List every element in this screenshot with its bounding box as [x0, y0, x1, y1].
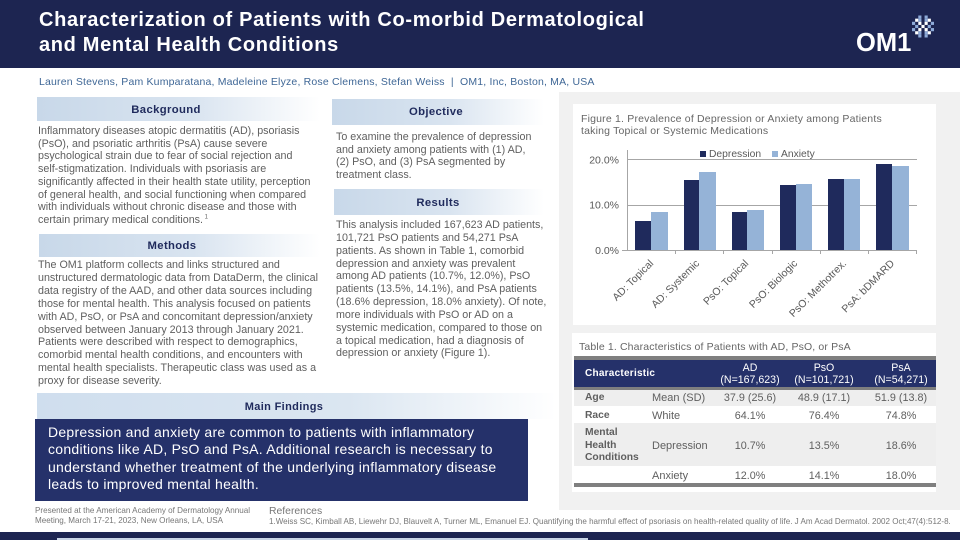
row: anxiety: 14.1%: [809, 470, 839, 482]
panel: table 1: [572, 333, 936, 492]
text: objective: (2) PsO, and (3) PsA segmented by: [336, 156, 505, 168]
text: results: depression or anxiety (Figure 1).: [336, 347, 490, 359]
text: objective: treatment class.: [336, 169, 412, 181]
references: [269, 506, 951, 526]
table caption: Table 1. Characteristics of Patients with AD, PsO, or PsA: [579, 341, 851, 353]
row: depression: Health: [585, 440, 616, 451]
callout text: Depression and anxiety are common to patients with inflammatory: [48, 424, 474, 440]
text: background: of general health, and social functioning when compared: [38, 189, 306, 201]
text: results: patients. As shown in Table 1, comorbid: [336, 245, 524, 257]
heading: results: [334, 189, 544, 215]
header: PsO: [794, 362, 854, 386]
references heading: References: [269, 506, 322, 517]
header: PsO: PsO: [814, 362, 834, 374]
text: results: depression and anxiety was prevalent: [336, 258, 515, 270]
row: anxiety: 12.0%: [735, 470, 765, 482]
row: age: 48.9 (17.1): [798, 392, 850, 404]
callout text: understand whether treatment of the underlying inflammatory disease: [48, 459, 496, 475]
x axis labels: PsO: Biologic: [747, 258, 800, 311]
title: Characterization of Patients with Co-morbid Dermatological: [39, 9, 645, 31]
header: PsO: (N=101,721): [794, 374, 854, 386]
heading: results: Results: [416, 197, 460, 209]
x axis labels: PsO: Methotrex.: [787, 258, 849, 320]
text: methods: Patients were described with respect to demographics,: [38, 336, 298, 348]
logo mark: dotted star: [912, 16, 934, 38]
callout text: conditions like AD, PsO and PsA. Additional research is necessary to: [48, 441, 493, 457]
header: PsA: (N=54,271): [874, 374, 928, 386]
row: age: [574, 390, 936, 406]
text: background: (PsO), and psoriatic arthritis (PsA) cause severe: [38, 138, 267, 150]
text: objective: [336, 131, 531, 181]
text: objective: and anxiety among patients with (1) AD,: [336, 144, 525, 156]
figure caption: Figure 1. Prevalence of Depression or Anxiety among Patients: [581, 113, 882, 125]
heading: objective: [332, 99, 544, 125]
text: background: Inflammatory diseases atopic dermatitis (AD), psoriasis: [38, 125, 300, 137]
row: depression: Depression: [652, 440, 708, 452]
text: results: patients (13.5%, 14.1%), and PsA patients: [336, 283, 537, 295]
logo wordmark: OM1: [856, 29, 911, 57]
row: depression: 13.5%: [809, 440, 839, 452]
text: methods: with AD, PsO, or PsA and concomitant depression/anxiety: [38, 311, 313, 323]
text: results: [336, 219, 546, 359]
row: anxiety: [574, 466, 936, 483]
header banner: [0, 0, 960, 68]
text: results: among AD patients (10.7%, 12.0%), PsO: [336, 270, 530, 282]
y axis labels: 10.0%: [589, 200, 619, 212]
text: methods: mental health specialists. Therapeutic class was used as a: [38, 362, 316, 374]
text: objective: To examine the prevalence of depression: [336, 131, 531, 143]
row: depression: 18.6%: [886, 440, 916, 452]
text: background: significantly affected in their health state utility, perception: [38, 176, 310, 188]
y axis labels: [589, 154, 619, 257]
header: AD: [720, 362, 780, 386]
row: depression: 10.7%: [735, 440, 765, 452]
header lower rule: [574, 387, 936, 390]
bars: depression: [635, 164, 892, 250]
text: methods: observed between January 2013 through January 2021.: [38, 324, 304, 336]
row: age: Mean (SD): [652, 392, 705, 404]
text: methods: those for mental health. This analysis focused on patients: [38, 298, 311, 310]
text: methods: [38, 259, 318, 387]
text: results: more individuals with PsO or AD on a: [336, 309, 513, 321]
row: race: White: [652, 410, 680, 422]
heading: methods: [39, 234, 320, 257]
text: conference note: [35, 506, 250, 525]
callout: main findings: [35, 419, 528, 501]
row: depression: Mental: [585, 427, 618, 438]
row: depression: [574, 423, 936, 466]
title: and Mental Health Conditions: [39, 34, 339, 56]
text: results: (18.6% depression, 18.0% anxiety). Of note,: [336, 296, 546, 308]
panel: figure 1: [573, 104, 936, 325]
text: background: [38, 125, 310, 226]
text: background: self-stigmatization. Individuals with psoriasis are: [38, 163, 266, 175]
heading: methods: Methods: [148, 240, 196, 252]
x axis labels: AD: Topical: [610, 258, 656, 304]
legend: Anxiety: [781, 149, 816, 160]
legend: Depression: [709, 149, 761, 160]
text: background: certain primary medical conditions. 1: [38, 214, 208, 226]
panel: figure and table background: [559, 92, 960, 510]
text: background: psychological strain due to fear of social rejection and: [38, 150, 292, 162]
footer accent: [57, 538, 588, 540]
row: race: 74.8%: [886, 410, 916, 422]
text: results: a topical medication, had a diagnosis of: [336, 335, 524, 347]
text: methods: comorbid mental health conditions, and encounters with: [38, 349, 303, 361]
header: AD: (N=167,623): [720, 374, 780, 386]
text: methods: unstructured dermatologic data from DataDerm, the clinical: [38, 272, 318, 284]
heading: main findings: Main Findings: [245, 401, 323, 413]
text: conference note: Presented at the American Academy of Dermatology Annual: [35, 506, 250, 515]
header: PsA: [874, 362, 928, 386]
reference text: 1.Weiss SC, Kimball AB, Liewehr DJ, Blauvelt A, Turner ML, Emanuel EJ. Quantifying the harmful effect of psoriasis on health-related quality of life. J Am Acad Dermatol. 2002 Oct;47(4):512-8.: [269, 517, 951, 526]
row: anxiety: Anxiety: [652, 470, 688, 482]
text: results: systemic medication, compared to those on: [336, 322, 542, 334]
logo: OM1: [856, 16, 934, 57]
title: [39, 9, 645, 56]
text: methods: The OM1 platform collects and links structured and: [38, 259, 280, 271]
row: race: 64.1%: [735, 410, 765, 422]
row: age: Age: [585, 392, 604, 403]
bar chart: prevalence by treatment: [589, 149, 917, 320]
row: race: [574, 406, 936, 423]
x axis labels: AD: Systemic: [649, 258, 702, 311]
heading: objective: Objective: [409, 106, 463, 118]
text: background: with individuals without chronic disease and those with: [38, 201, 297, 213]
header: AD: AD: [743, 362, 757, 374]
header: PsA: PsA: [891, 362, 911, 374]
row: race: 76.4%: [809, 410, 839, 422]
row: race: Race: [585, 410, 610, 421]
y axis labels: 20.0%: [589, 154, 619, 166]
callout text: [48, 424, 496, 492]
text: conference note: Meeting, March 17-21, 2023, New Orleans, LA, USA: [35, 516, 223, 525]
bars: anxiety: [651, 166, 909, 250]
header: characteristic: Characteristic: [585, 368, 655, 379]
footer bar: [0, 532, 960, 540]
figure caption: [581, 113, 882, 137]
x axis labels: PsO: Topical: [701, 258, 751, 308]
table top rule: [574, 356, 936, 360]
row: anxiety: 18.0%: [886, 470, 916, 482]
x axis labels: [610, 257, 897, 320]
row: age: 37.9 (25.6): [724, 392, 776, 404]
text: results: This analysis included 167,623 AD patients,: [336, 219, 543, 231]
figure caption: taking Topical or Systemic Medications: [581, 125, 768, 137]
heading: background: Background: [131, 104, 201, 116]
heading: main findings: [37, 393, 556, 419]
gridlines: [622, 150, 917, 254]
table header row: [574, 360, 936, 387]
text: methods: proxy for disease severity.: [38, 375, 162, 387]
table bottom rule: [574, 483, 936, 487]
legend: [700, 149, 816, 160]
table: patient characteristics: [574, 356, 936, 487]
x axis labels: PsA: bDMARD: [840, 257, 897, 315]
row: age: 51.9 (13.8): [875, 392, 927, 404]
heading: background: [37, 97, 320, 121]
text: results: 101,721 PsO patients and 54,271 PsA: [336, 232, 518, 244]
text: methods: data registry of the AAD, and other data sources including: [38, 285, 312, 297]
row: depression: Conditions: [585, 452, 639, 463]
authors: Lauren Stevens, Pam Kumparatana, Madeleine Elyze, Rose Clemens, Stefan Weiss | OM1, Inc, Boston, MA, USA: [39, 76, 595, 88]
callout text: leads to improved mental health.: [48, 476, 259, 492]
y axis labels: 0.0%: [595, 245, 619, 257]
